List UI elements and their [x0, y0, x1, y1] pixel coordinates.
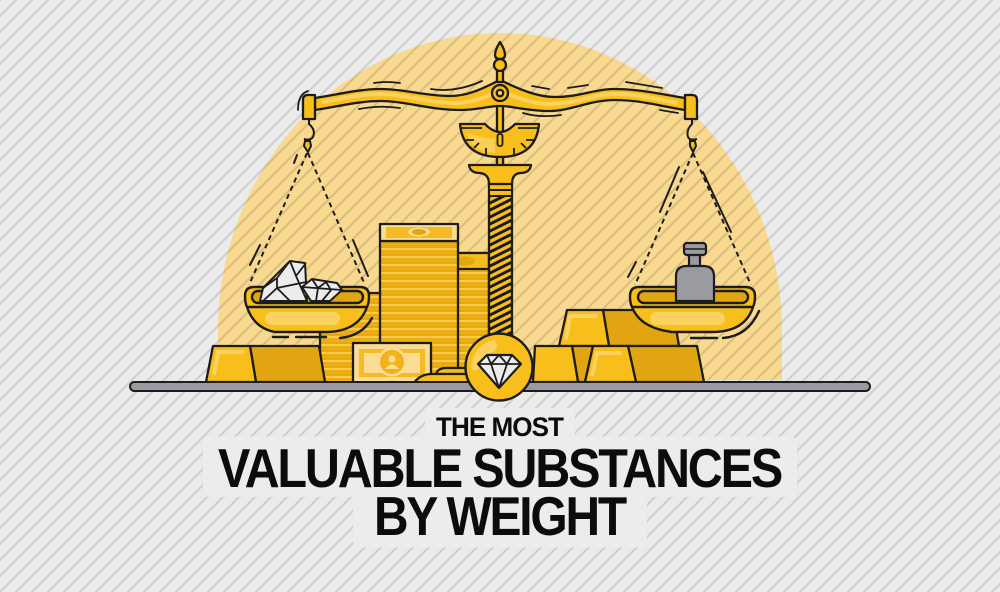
column capital — [469, 165, 531, 184]
stacks of banknotes — [320, 224, 489, 383]
balance beam — [303, 42, 697, 119]
right gold bars — [533, 310, 704, 382]
finial — [494, 42, 506, 82]
ground shelf — [130, 382, 870, 391]
title block — [203, 408, 797, 547]
right pan — [630, 287, 759, 338]
right beam end — [685, 95, 697, 119]
icon: grey weight in right pan — [676, 243, 714, 301]
main stack — [380, 224, 458, 383]
threaded column — [489, 183, 512, 346]
left chain and hook — [249, 119, 368, 285]
left gold bar — [206, 346, 325, 382]
front banknote — [353, 343, 431, 383]
back right stack — [455, 253, 489, 383]
diamond badge — [466, 334, 532, 400]
icon: diamond — [478, 355, 521, 388]
right chain and hook — [628, 119, 751, 285]
title backing panels — [203, 408, 797, 547]
heading: by weight: BY WEIGHT — [374, 485, 627, 547]
heading: the most: THE MOST — [436, 412, 564, 442]
pivot — [492, 85, 508, 101]
sun circle backdrop — [218, 33, 782, 380]
back left stack — [320, 293, 382, 383]
motion lines around beam — [298, 81, 678, 116]
left beam end — [303, 95, 315, 119]
left pan — [245, 287, 372, 338]
dial — [460, 124, 539, 157]
small gold base steps — [414, 368, 470, 383]
scale stand and dial — [460, 104, 539, 184]
icon: diamonds in left pan — [260, 261, 342, 301]
heading: valuable substances: VALUABLE SUBSTANCES — [218, 437, 782, 499]
